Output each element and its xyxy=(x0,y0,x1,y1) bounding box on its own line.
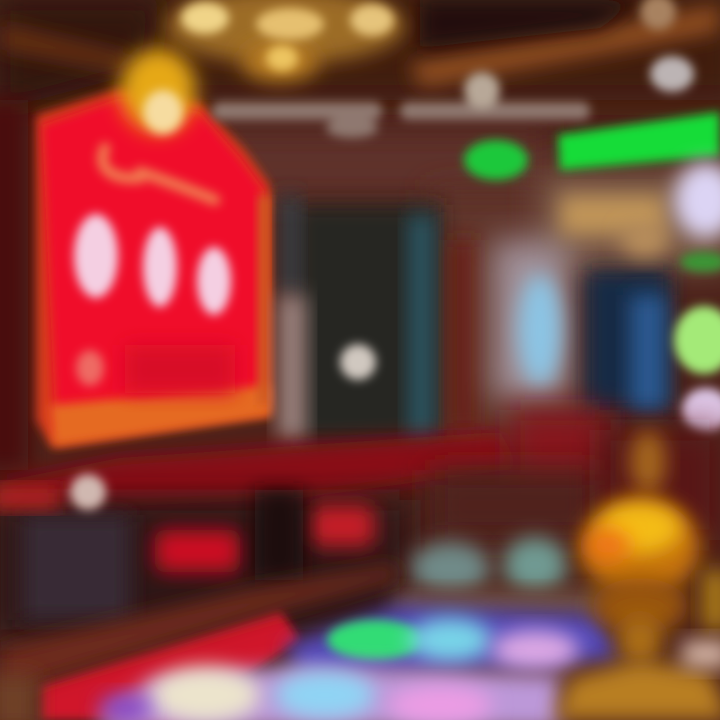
dark furniture row xyxy=(0,474,410,640)
chandelier xyxy=(165,0,405,82)
red seating band xyxy=(0,410,720,540)
hanging yellow lamp xyxy=(120,48,196,134)
golden trophy xyxy=(555,430,720,720)
sign white numerals xyxy=(74,214,231,315)
ceiling spotlights xyxy=(640,0,694,92)
right windows and screens xyxy=(450,162,720,432)
grey blurred banner text xyxy=(212,72,590,138)
game tables xyxy=(395,537,605,618)
central dark doorway xyxy=(278,195,441,440)
colourful lit floor xyxy=(99,605,620,720)
green neon signs xyxy=(464,112,720,180)
red sign board xyxy=(36,88,272,448)
red carpet xyxy=(0,565,400,720)
sign heading glow xyxy=(102,148,215,200)
